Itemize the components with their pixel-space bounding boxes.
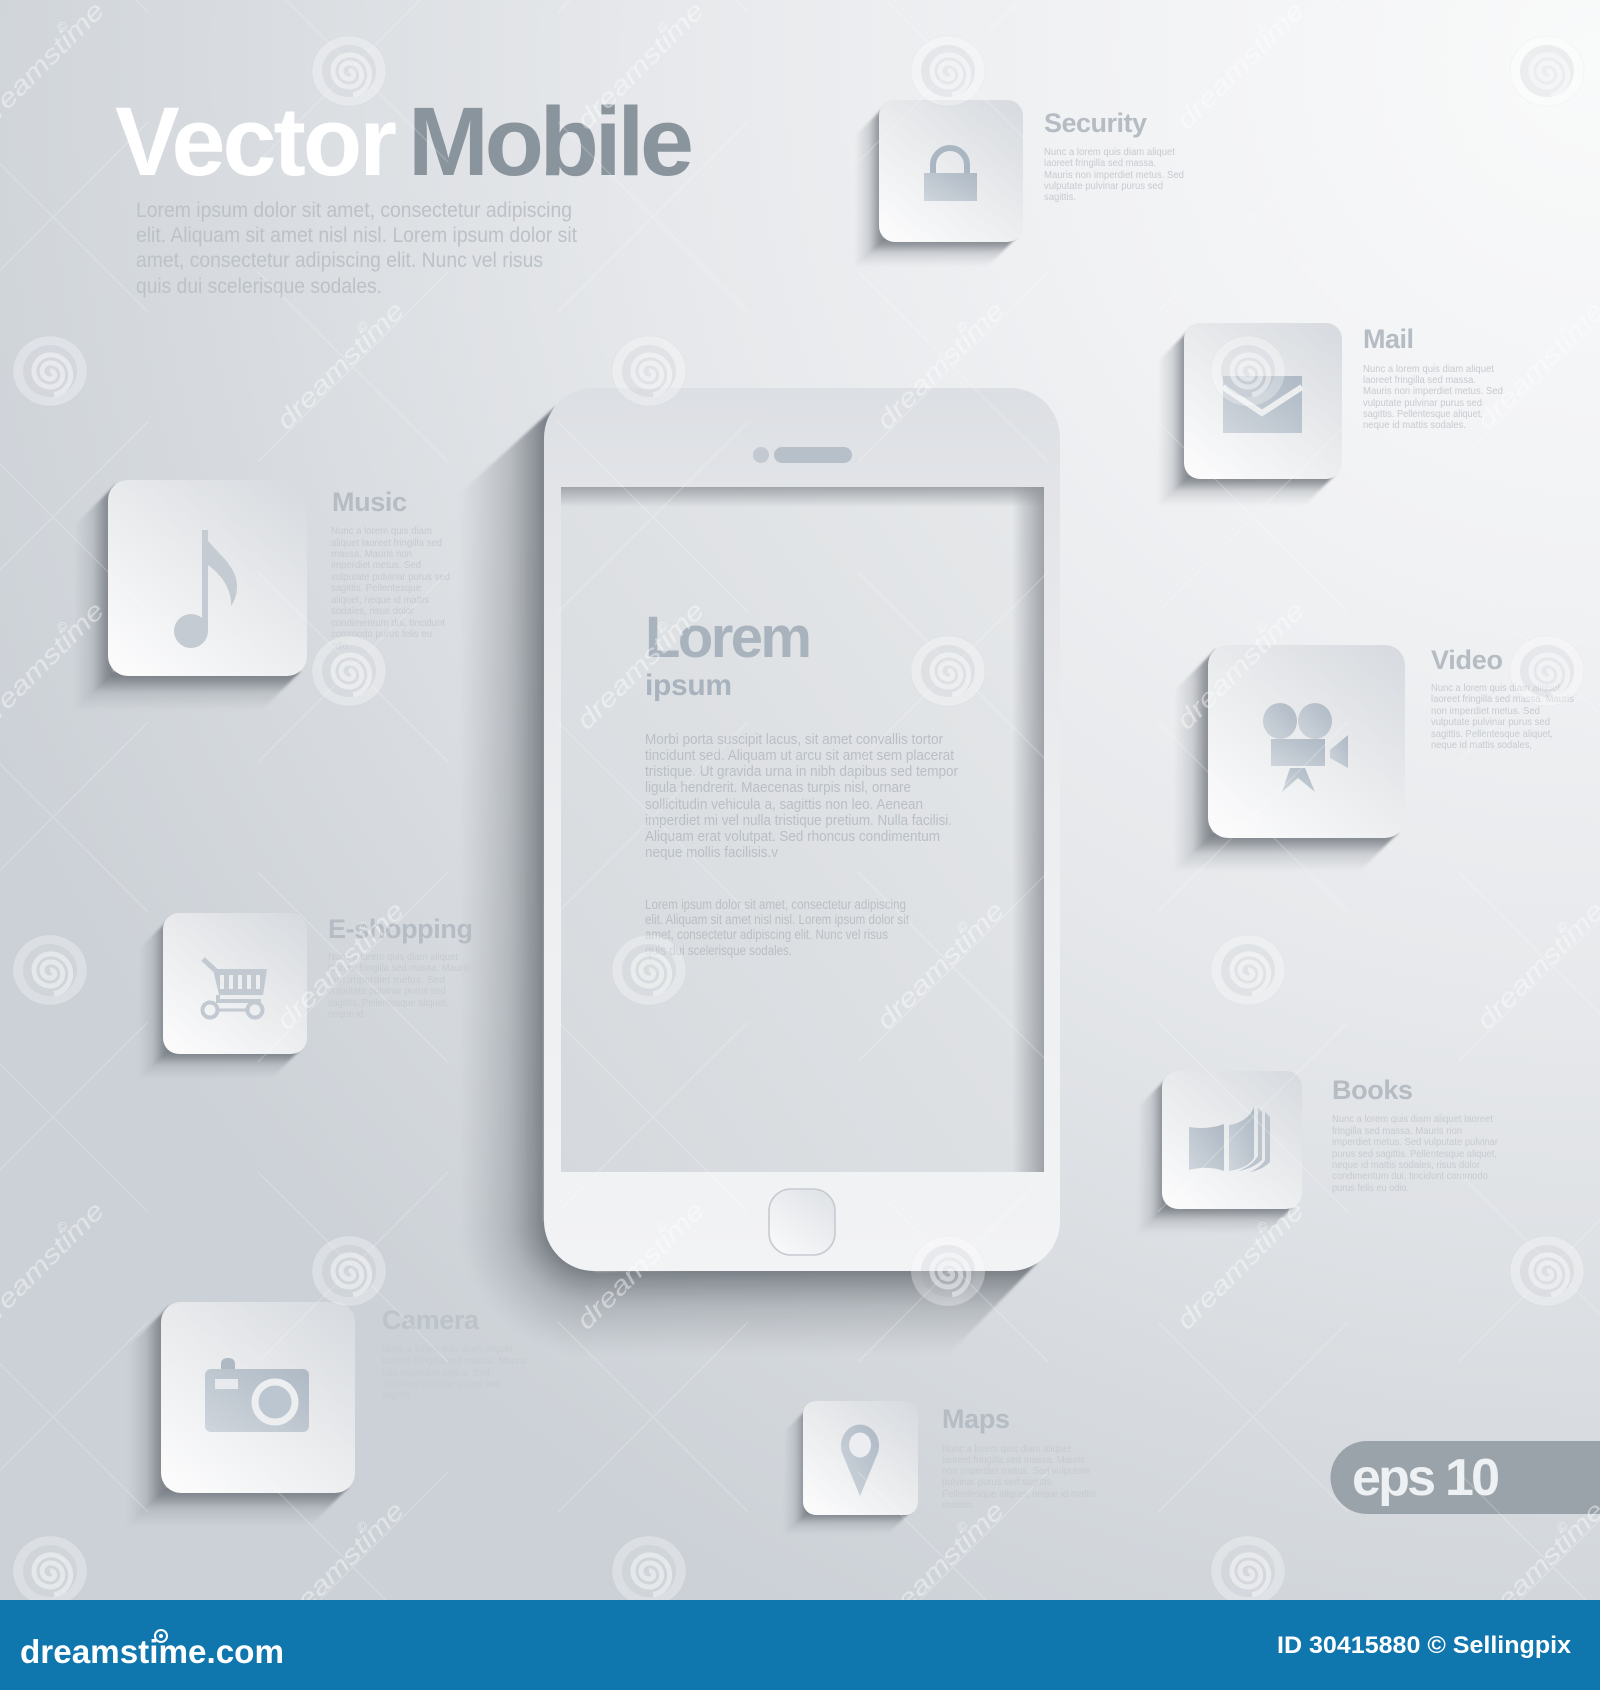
watermark text: dreamstime (270, 1495, 410, 1635)
text: books: condimentum dui, tincidunt commodo (1332, 1170, 1488, 1182)
text: e-shopping: non imperdiet metus. Sed (328, 974, 445, 986)
text: mail: Mauris non imperdiet metus. Sed (1363, 385, 1503, 397)
watermark text: dreamstime (1470, 895, 1600, 1035)
panel: mail (1157, 323, 1503, 506)
phone (458, 388, 1060, 1357)
text: video: vulputate pulvinar purus sed (1431, 716, 1550, 728)
phone screen (561, 487, 1044, 1172)
text: music: imperdiet metus. Sed (331, 559, 421, 571)
watermark text: dreamstime (1170, 595, 1310, 735)
panel: e-shopping (138, 913, 473, 1079)
heading: maps: Maps (942, 1404, 1010, 1434)
screen body text: tristique. Ut gravida urna in nibh dapibus sed tempor (645, 764, 958, 780)
text: music: commodo purus felis eu (331, 628, 432, 640)
text: e-shopping: vulputate pulvinar purus sed (328, 985, 446, 997)
watermark text: © (353, 1518, 371, 1536)
icon: music note (174, 528, 237, 648)
screen secondary text: amet, consectetur adipiscing elit. Nunc vel risus (645, 927, 888, 942)
screen secondary text: Lorem ipsum dolor sit amet, consectetur adipiscing (645, 897, 906, 912)
panel: music (73, 480, 450, 711)
watermark text: © (53, 1218, 71, 1236)
text: camera: non imperdiet metus. Sed (382, 1367, 490, 1379)
title: Vector (115, 87, 397, 196)
text: security: Nunc a lorem quis diam aliquet (1044, 146, 1175, 158)
icon: envelope (1223, 376, 1302, 433)
intro text block (136, 199, 577, 298)
title (115, 87, 694, 196)
watermark text: dreamstime (570, 1195, 710, 1335)
text: maps: sodales. (942, 1499, 975, 1511)
text: maps: non imperdiet metus. Sed vulputate (942, 1465, 1090, 1477)
intro text block: amet, consectetur adipiscing elit. Nunc vel risus (136, 249, 543, 272)
screen secondary text: quis dui scelerisque sodales. (645, 943, 792, 958)
text: security: Mauris non imperdiet metus. Sed (1044, 169, 1184, 181)
icon: padlock (924, 148, 977, 201)
text: security: sagittis. (1044, 191, 1076, 203)
text: camera: laoreet fringilla sed massa. Mauris (382, 1355, 527, 1367)
text: video: Nunc a lorem quis diam aliquet (1431, 682, 1560, 694)
watermark text: © (653, 618, 671, 636)
watermark text: © (1553, 918, 1571, 936)
text: music: sagittis. Pellentesque (331, 582, 421, 594)
watermark text: dreamstime (1170, 1195, 1310, 1335)
panel: security (854, 100, 1184, 267)
intro text block: elit. Aliquam sit amet nisl nisl. Lorem ipsum dolor sit (136, 224, 577, 247)
panel: video (1173, 645, 1574, 872)
watermark text: dreamstime (270, 895, 410, 1035)
watermark text: © (1253, 618, 1271, 636)
watermark text: © (1253, 18, 1271, 36)
text: books: fringilla sed massa. Mauris non (1332, 1125, 1462, 1137)
text: mail: neque id mattis sodales. (1363, 419, 1466, 431)
text: mail: vulputate pulvinar purus sed (1363, 397, 1482, 409)
watermark text: © (53, 618, 71, 636)
watermark text: © (953, 318, 971, 336)
watermark text: © (653, 18, 671, 36)
text: camera: vulputate pulvinar purus sed (382, 1378, 500, 1390)
watermark text: dreamstime (570, 0, 710, 135)
text: camera: Nunc a lorem quis diam aliquet (382, 1343, 513, 1355)
screen heading (645, 605, 812, 702)
icon: map pin (841, 1425, 879, 1496)
heading: mail: Mail (1363, 324, 1414, 354)
text: books: purus felis eu odio. (1332, 1182, 1409, 1194)
text: camera (382, 1343, 527, 1401)
watermark text: dreamstime (870, 1495, 1010, 1635)
watermark text: dreamstime (270, 295, 410, 435)
watermark text: dreamstime (870, 295, 1010, 435)
screen body text: neque mollis facilisis.v (645, 845, 779, 861)
watermark text: © (353, 318, 371, 336)
text: maps: pulvinar purus sed sagittis. (942, 1476, 1054, 1488)
watermark text: © (1253, 1218, 1271, 1236)
tile: video (1208, 645, 1405, 838)
text: books: neque id mattis sodales, risus dolor (1332, 1159, 1480, 1171)
watermark text: dreamstime (1470, 295, 1600, 435)
tile: e-shopping (163, 913, 307, 1054)
text: mail: sagittis. Pellentesque aliquet, (1363, 408, 1483, 420)
text: music: aliquet, neque id mattis (331, 594, 429, 606)
text: security: laoreet fringilla sed massa. (1044, 157, 1156, 169)
text: maps: Pellentesque aliquet, neque id mattis (942, 1488, 1096, 1500)
title: Mobile (408, 87, 694, 196)
screen body text: imperdiet mi vel nulla tristique pretium. Nulla facilisi. (645, 813, 952, 829)
watermark text: dreamstime (570, 595, 710, 735)
intro text block: quis dui scelerisque sodales. (136, 275, 382, 298)
text: maps (942, 1443, 1096, 1511)
watermark text: © (1553, 1518, 1571, 1536)
watermark text: © (953, 918, 971, 936)
text: e-shopping: laoreet fringilla sed massa. Mauris (328, 962, 470, 974)
panel: camera (126, 1302, 527, 1527)
phone long shadow (458, 406, 1038, 1357)
image id credit: ID 30415880 © Sellingpix (1277, 1632, 1572, 1659)
icon: books (1189, 1107, 1270, 1172)
text: video: sagittis. Pellentesque aliquet, (1431, 728, 1553, 740)
icon: shopping cart (202, 959, 267, 1018)
icon: movie camera (1263, 703, 1348, 792)
panel: books (1137, 1071, 1498, 1234)
watermark text: © (353, 918, 371, 936)
panel: maps (783, 1401, 1096, 1535)
watermark text: dreamstime (870, 895, 1010, 1035)
heading: camera: Camera (382, 1305, 480, 1335)
screen body text: Aliquam erat volutpat. Sed rhoncus condimentum (645, 829, 940, 845)
phone home button (769, 1189, 835, 1255)
text: security (1044, 146, 1184, 203)
tile: security (879, 100, 1023, 242)
footer banner (0, 1600, 1600, 1690)
text: video: laoreet fringilla sed massa. Mauris (1431, 693, 1574, 705)
text: music: condimentum dui, tincidunt (331, 617, 445, 629)
text: e-shopping (328, 951, 470, 1020)
watermark text: dreamstime (1170, 0, 1310, 135)
text: security: vulputate pulvinar purus sed (1044, 180, 1163, 192)
screen body text: ligula hendrerit. Maecenas turpis nisl, ornare (645, 780, 911, 796)
phone body (544, 388, 1060, 1271)
heading: e-shopping: E-shopping (328, 914, 473, 944)
text: e-shopping: neque id. (328, 1008, 366, 1020)
text: books: imperdiet metus. Sed vulputate pulvinar (1332, 1136, 1498, 1148)
heading: books: Books (1332, 1075, 1413, 1105)
text: maps: Nunc a lorem quis diam aliquet (942, 1443, 1071, 1455)
text: maps: laoreet fringilla sed massa. Mauris (942, 1454, 1085, 1466)
text: music: aliquet laoreet fringilla sed (331, 537, 442, 549)
tile: mail (1184, 323, 1342, 479)
text: music: Nunc a lorem quis diam (331, 525, 432, 537)
tile: books (1162, 1071, 1302, 1209)
badge: eps 10 (1330, 1441, 1600, 1514)
text: music: massa. Mauris non (331, 548, 412, 560)
text: mail (1363, 363, 1503, 431)
screen heading: Lorem (645, 605, 812, 670)
screen body text: tincidunt sed. Aliquam ut arcu sit amet sem placerat (645, 748, 954, 764)
text: books: Nunc a lorem quis diam aliquet laoreet (1332, 1113, 1493, 1125)
heading: security: Security (1044, 108, 1147, 138)
watermark text: © (1553, 318, 1571, 336)
text: e-shopping: Nunc a lorem quis diam aliquet (328, 951, 458, 963)
heading: music: Music (332, 487, 407, 517)
screen body text: sollicitudin vehicula a, sagittis non leo. Aenean (645, 797, 923, 813)
watermark text: © (653, 1218, 671, 1236)
text: e-shopping: sagittis. Pellentesque aliquet, (328, 997, 448, 1009)
intro text block: Lorem ipsum dolor sit amet, consectetur adipiscing (136, 199, 572, 222)
screen secondary text: elit. Aliquam sit amet nisl nisl. Lorem ipsum dolor sit (645, 912, 909, 927)
text: camera: sagittis. (382, 1389, 413, 1401)
tile: camera (161, 1302, 355, 1493)
badge: eps 10: eps 10 (1352, 1449, 1500, 1507)
logo: dreamstime.com: dreamstime.com (20, 1633, 284, 1670)
text: music (331, 525, 450, 652)
text: video: neque id mattis sodales, (1431, 739, 1532, 751)
text: mail: laoreet fringilla sed massa. (1363, 374, 1476, 386)
watermark text: © (953, 1518, 971, 1536)
tile: maps (803, 1401, 918, 1515)
text: books (1332, 1113, 1498, 1194)
phone speaker (753, 447, 852, 463)
screen body text: Morbi porta suscipit lacus, sit amet convallis tortor (645, 732, 943, 748)
screen body text (645, 732, 958, 861)
text: video: non imperdiet metus. Sed (1431, 705, 1540, 717)
text: music: vulputate pulvinar purus sed (331, 571, 450, 583)
watermark text: dreamstime (1470, 1495, 1600, 1635)
text: music: odio. (331, 640, 350, 652)
watermark text: © (53, 18, 71, 36)
screen heading: ipsum (645, 669, 732, 702)
heading: video: Video (1431, 645, 1503, 675)
text: video (1431, 682, 1574, 751)
icon: photo camera (205, 1358, 309, 1432)
text: mail: Nunc a lorem quis diam aliquet (1363, 363, 1494, 375)
text: books: purus sed sagittis. Pellentesque aliquet, (1332, 1148, 1497, 1160)
text: music: sodales, risus dolor (331, 605, 414, 617)
tile: music (108, 480, 307, 676)
screen secondary text (645, 897, 909, 958)
